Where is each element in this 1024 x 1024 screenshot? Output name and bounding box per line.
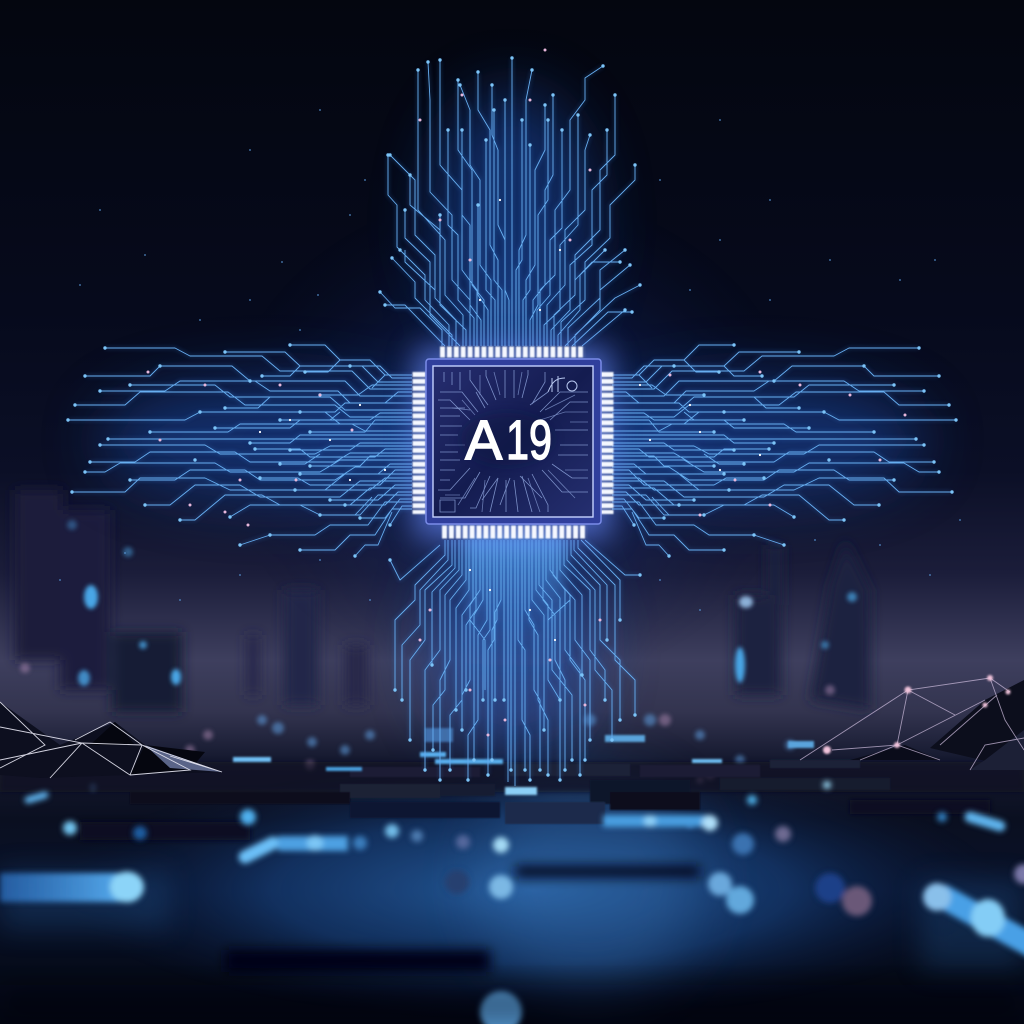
chip outer glow: [414, 347, 612, 539]
low-poly wireframe mountain right: [800, 675, 1024, 770]
horizon bokeh lights: [20, 663, 835, 829]
chip internal circuitry: [438, 370, 588, 512]
chip body: [426, 359, 601, 524]
bar: centre right: [603, 815, 718, 831]
circuit traces: top arm: [380, 58, 640, 346]
circuit traces: left arm: [68, 345, 412, 556]
drifting star particles: [60, 110, 960, 610]
chip corner detail: [548, 376, 577, 392]
chip label: [465, 408, 552, 471]
bottom vignette: [0, 985, 1024, 1024]
chip label: A: [465, 408, 503, 471]
bar: far left: [0, 872, 144, 902]
bar: upper right: [970, 817, 1000, 826]
chip pins: [419, 352, 607, 532]
dark floor blurs: [225, 866, 700, 972]
foreground bokeh bars and lights: [0, 781, 1024, 1024]
floor neon strips: [233, 728, 814, 795]
low-poly wireframe mountain left: [0, 702, 222, 778]
floor tiles: [0, 760, 1024, 840]
blurred city lights: [67, 520, 857, 686]
bar: mid left: [245, 835, 367, 857]
floating light orbs: [28, 781, 1024, 1024]
circuit traces glow: [68, 58, 956, 786]
soft glow behind circuit arms: [100, 90, 925, 760]
bar: far right diagonal: [923, 883, 1024, 950]
central halo behind chip: [222, 190, 802, 690]
blurred city skyline: [15, 490, 870, 712]
chip label: 19: [506, 408, 552, 471]
light beam below chip: [465, 535, 565, 685]
circuit traces: bottom arm: [390, 540, 640, 786]
chip centre dark spot behind label: [461, 413, 553, 465]
floor blue reflection: [60, 760, 1000, 1020]
circuit traces: right arm: [612, 345, 956, 556]
trace end nodes: [68, 50, 956, 780]
